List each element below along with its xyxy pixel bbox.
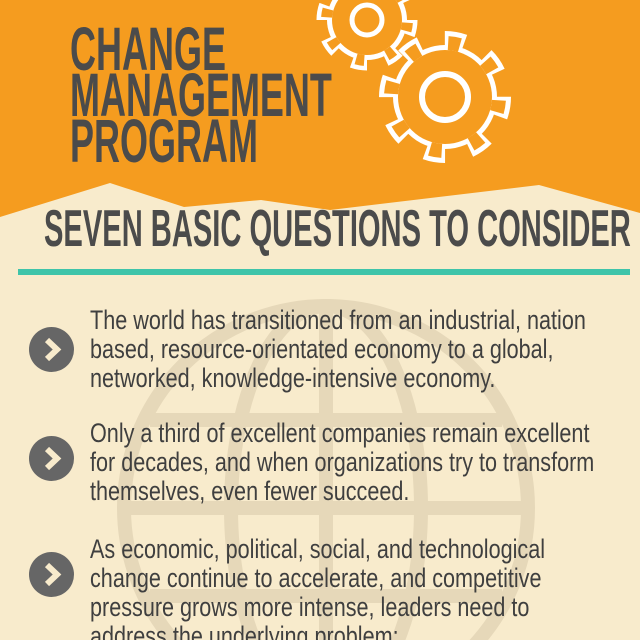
text block: pressure grows more intense, leaders need to: [90, 592, 529, 622]
icon: small gear: [323, 0, 411, 64]
text block: [90, 305, 586, 393]
text block: The world has transitioned from an industrial, nation: [90, 305, 586, 335]
icon: chevron circle: [29, 552, 74, 597]
globe watermark: [124, 306, 528, 640]
text block: change continue to accelerate, and competitive: [90, 563, 542, 593]
text block: Only a third of excellent companies remain excellent: [90, 418, 589, 448]
text block: themselves, even fewer succeed.: [90, 476, 409, 506]
text block: networked, knowledge-intensive economy.: [90, 363, 495, 393]
title: CHANGE: [70, 15, 226, 83]
title: PROGRAM: [70, 107, 258, 175]
text block: [90, 418, 594, 506]
bullet 3: [29, 535, 545, 640]
subtitle: SEVEN BASIC QUESTIONS TO CONSIDER: [44, 200, 631, 258]
bullet 2: [29, 418, 594, 506]
text block: based, resource-orientated economy to a global,: [90, 334, 553, 364]
icon: chevron circle: [29, 436, 74, 481]
bullet 1: [29, 305, 586, 393]
icon: large gear: [387, 39, 503, 155]
teal divider: [18, 269, 630, 275]
text block: for decades, and when organizations try to transform: [90, 447, 594, 477]
icon: chevron circle: [29, 327, 74, 372]
text block: [90, 535, 545, 640]
title: MANAGEMENT: [70, 61, 332, 129]
title: [70, 15, 332, 175]
